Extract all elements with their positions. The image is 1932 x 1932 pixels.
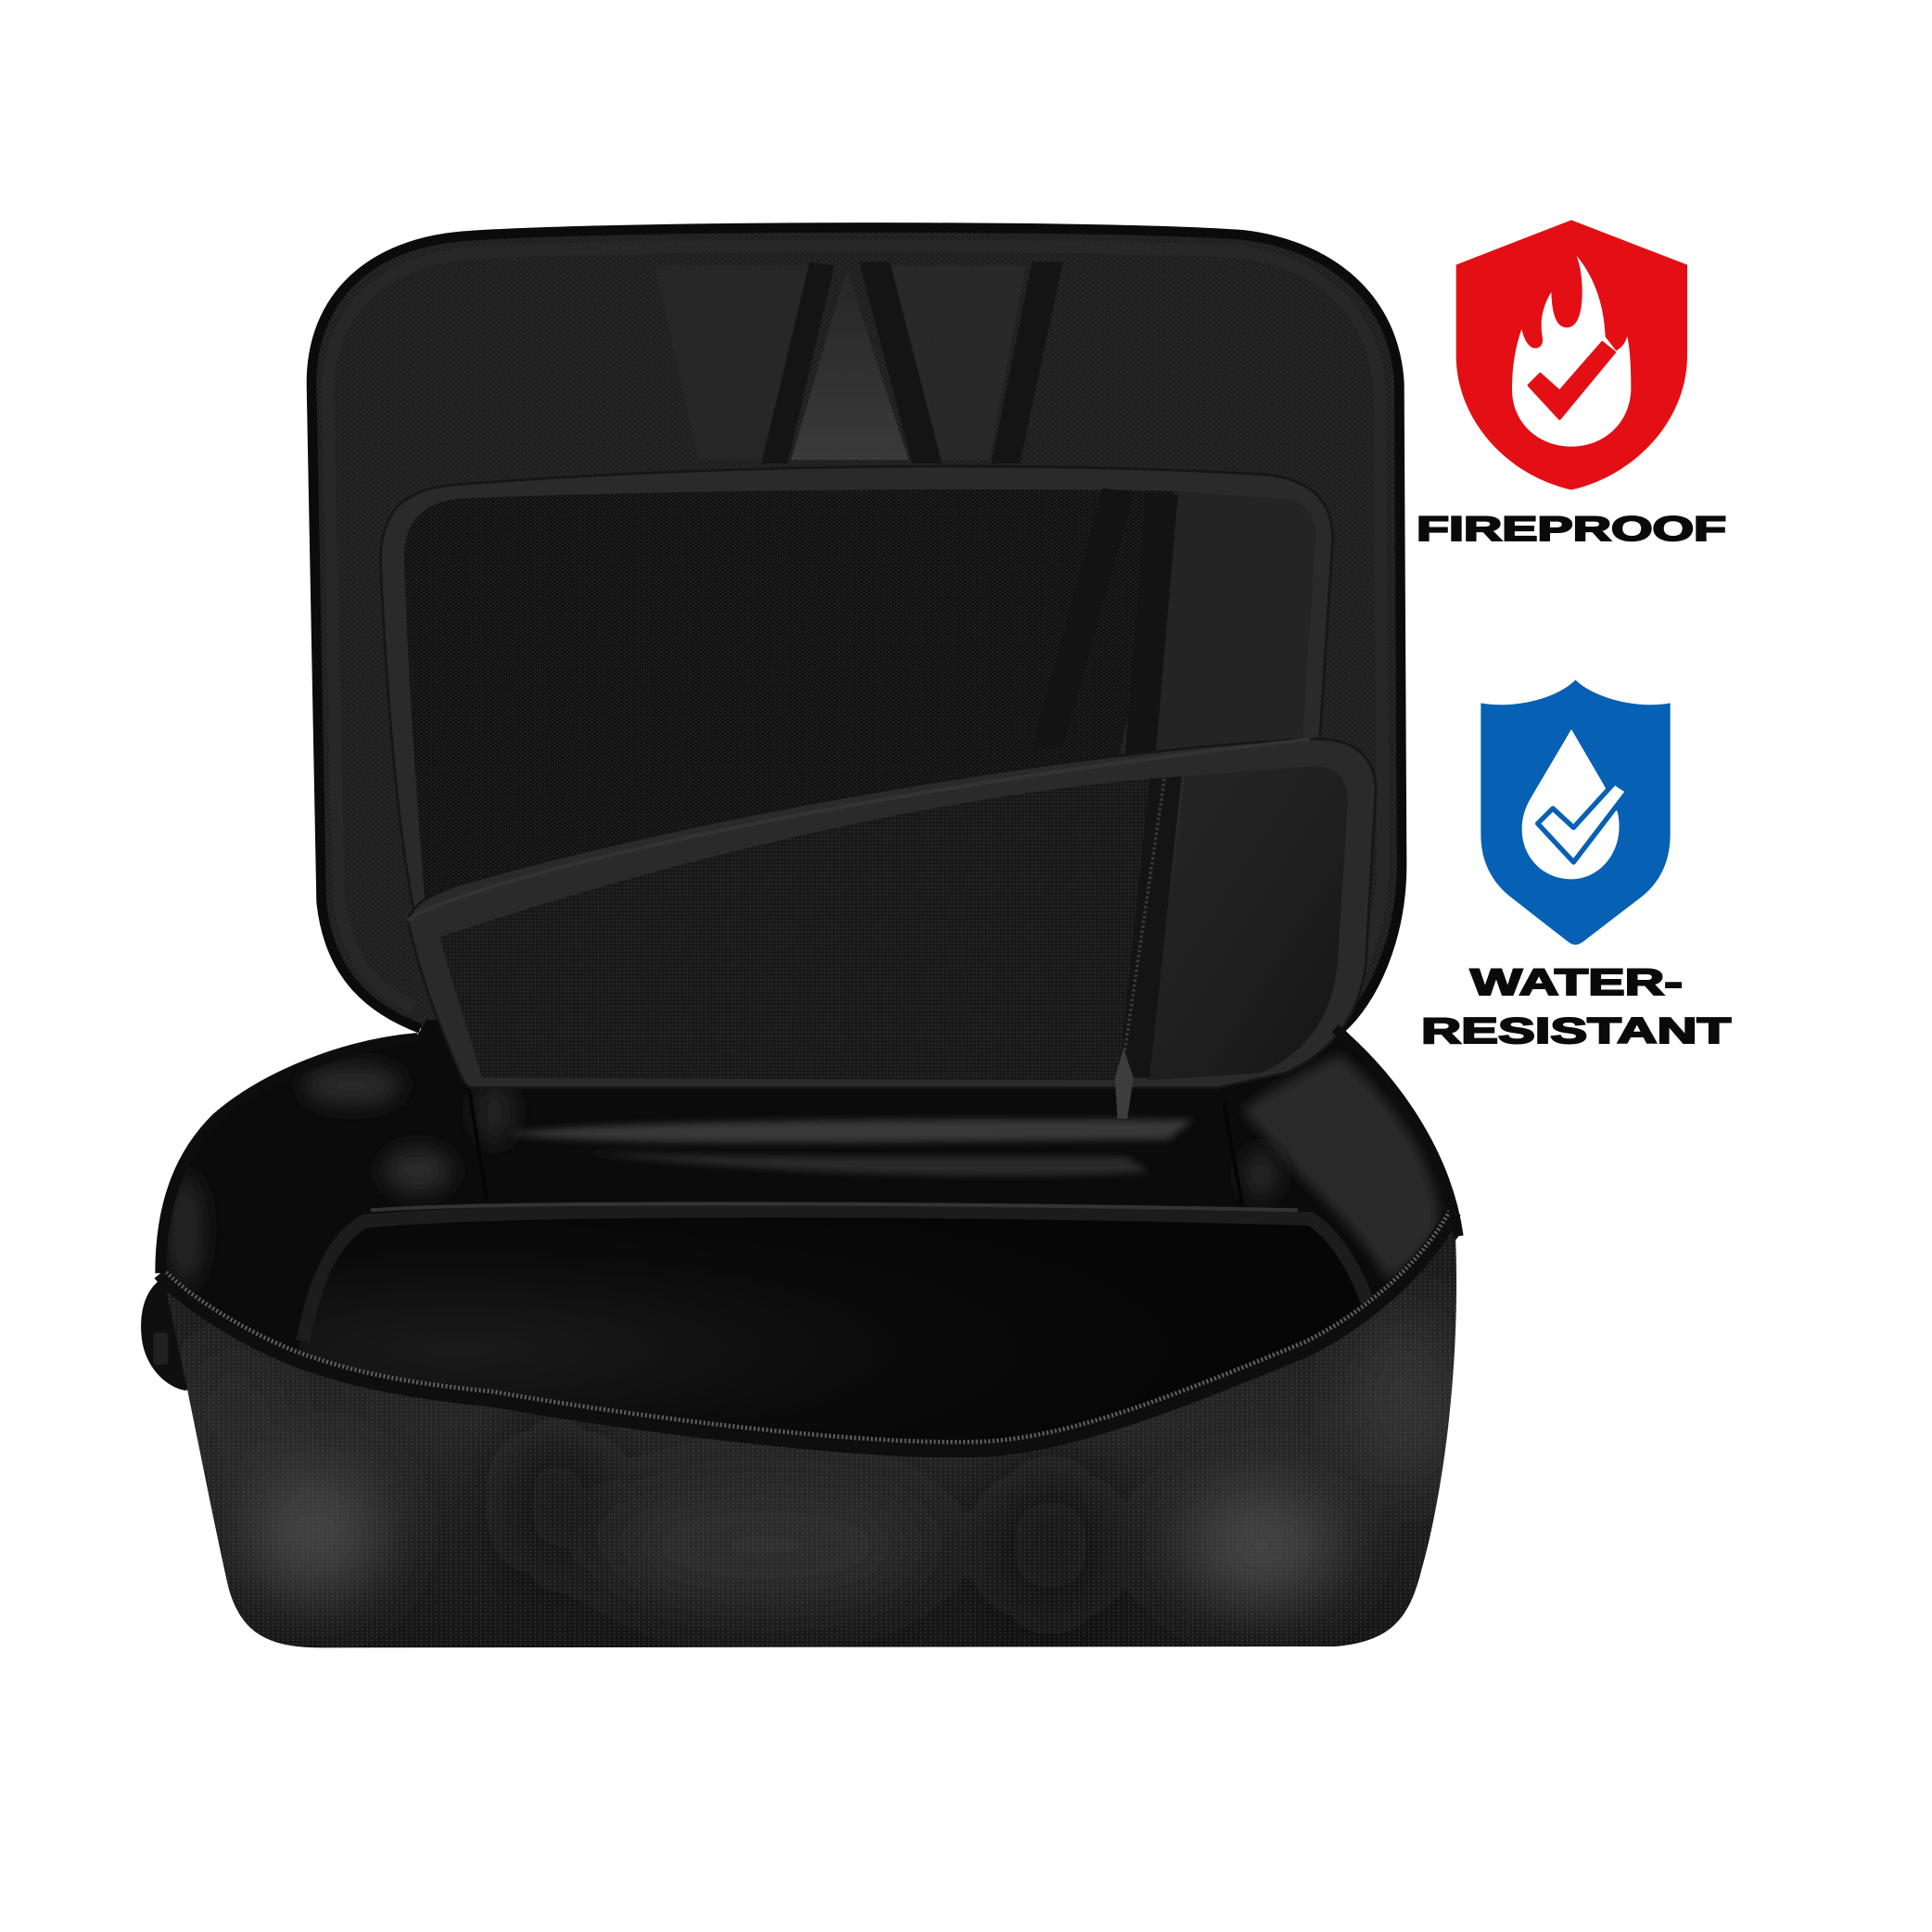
lid rear fabric triangle <box>791 270 909 460</box>
lower compartment back and side walls <box>160 1020 1458 1372</box>
pocket fabric <box>1147 766 1348 1080</box>
upper zipper along the compartment rim <box>160 1028 1458 1273</box>
fabric area of the middle panel <box>1112 490 1316 791</box>
lid straps <box>761 262 1063 464</box>
middle panel straps <box>1031 489 1178 756</box>
satin highlights on the inner lining <box>168 1065 1278 1286</box>
water-resistant badge <box>1421 680 1731 1051</box>
label: water-resistant: WATER- <box>1470 962 1683 1003</box>
bag front exterior with textured surface <box>167 1229 1457 1648</box>
lock on the left side of the bag <box>141 1279 196 1391</box>
product photo: open black fireproof bag <box>141 216 1471 1657</box>
floor panel inside the compartment <box>297 1203 1379 1446</box>
label: water-resistant: RESISTANT <box>1421 1011 1731 1051</box>
label: fireproof: FIREPROOF <box>1417 510 1726 548</box>
lid of the bag with mesh lining <box>297 216 1409 1032</box>
label: water-resistant <box>1421 962 1731 1051</box>
icon: red shield with flame and check <box>1456 220 1687 489</box>
middle mesh organizer panel <box>380 466 1333 939</box>
fireproof badge <box>1417 220 1726 548</box>
front zippered pocket panel <box>408 739 1376 1119</box>
right wall lining highlight <box>1242 1054 1439 1279</box>
front zipper along the compartment opening <box>160 1204 1454 1449</box>
icon: blue shield with water drop and check <box>1481 680 1671 945</box>
pocket zipper <box>1115 776 1182 1119</box>
